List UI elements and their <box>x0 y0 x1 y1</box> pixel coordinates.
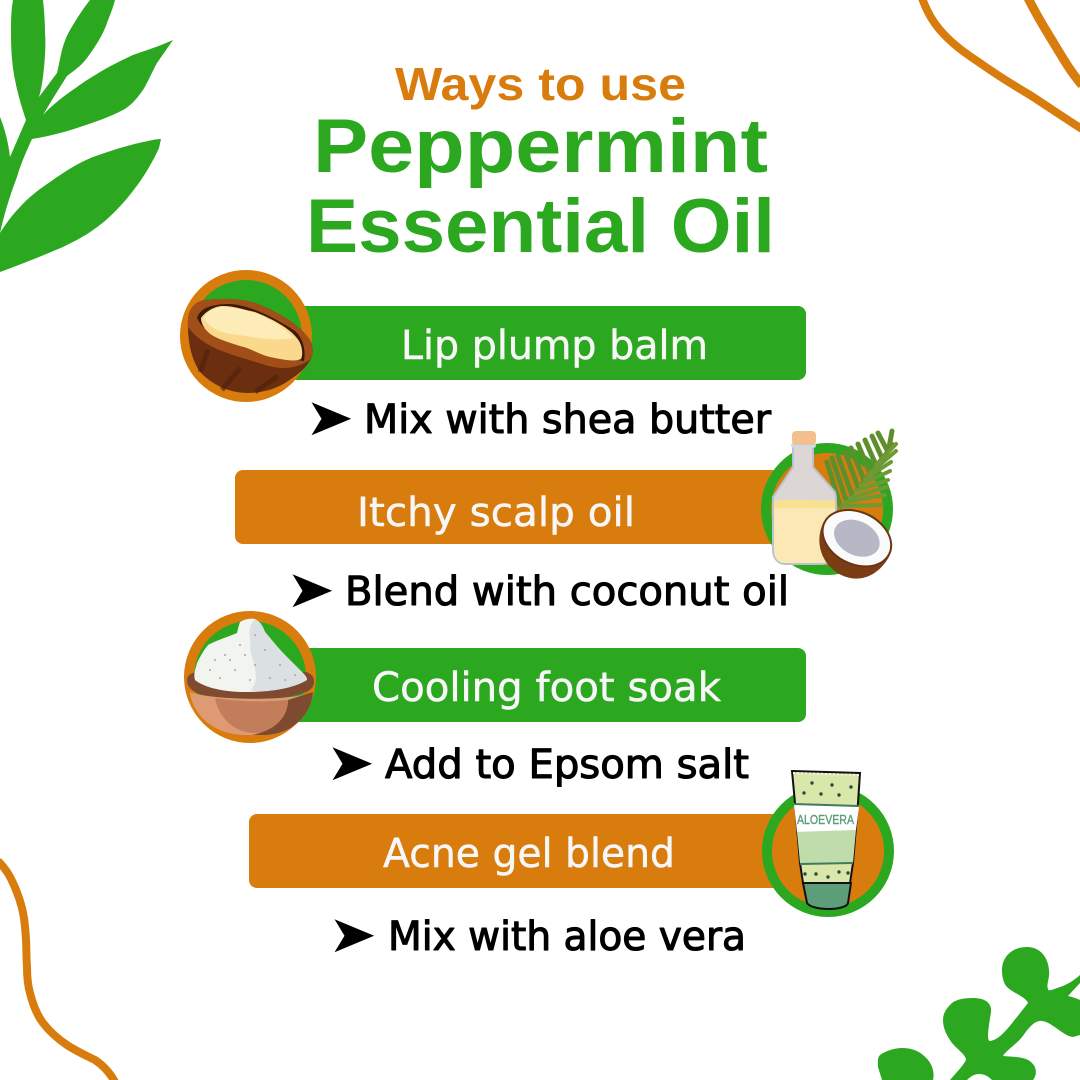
decoration: bottom-right green sprig <box>878 947 1080 1080</box>
palm frond <box>827 431 896 517</box>
decoration: top-right orange curves <box>922 0 1080 129</box>
dots <box>802 781 853 879</box>
tube label: ALOEVERA <box>797 812 854 827</box>
arrow: ➤ <box>286 560 335 620</box>
bar label: Itchy scalp oil <box>357 490 635 536</box>
arrow: ➤ <box>305 388 354 448</box>
item text: Mix with shea butter <box>364 397 772 443</box>
decoration: top-left green leaves <box>0 0 173 272</box>
title line: Essential Oil: Essential Oil <box>306 184 775 269</box>
coconut half <box>806 498 902 590</box>
bottle <box>773 445 836 564</box>
icon: aloe vera tube <box>767 771 889 912</box>
title line: Peppermint: Peppermint <box>313 104 768 189</box>
arrow: ➤ <box>328 905 377 965</box>
bowl <box>190 692 313 735</box>
panel: lip plump balm bar <box>270 306 806 380</box>
salt heap <box>194 619 307 692</box>
list item: mix with aloe vera <box>328 905 746 965</box>
bar label: Acne gel blend <box>383 831 675 877</box>
bar label: Cooling foot soak <box>372 665 722 711</box>
panel: cooling foot soak bar <box>280 648 806 722</box>
title line: Ways to use: Ways to use <box>395 58 686 110</box>
item text: Blend with coconut oil <box>345 569 789 615</box>
list item: add to Epsom salt <box>326 733 749 793</box>
panel: acne gel blend bar <box>249 814 805 888</box>
list item: mix with shea butter <box>305 388 772 448</box>
arrow: ➤ <box>326 733 375 793</box>
title <box>306 58 775 269</box>
list item: blend with coconut oil <box>286 560 789 620</box>
item text: Add to Epsom salt <box>385 742 749 788</box>
icon: shea butter in shell <box>185 275 313 397</box>
icon: bowl of Epsom salt <box>187 616 314 738</box>
tube <box>792 771 860 883</box>
item text: Mix with aloe vera <box>388 914 746 960</box>
bowl rim <box>187 672 314 700</box>
bar label: Lip plump balm <box>401 323 708 369</box>
icon: oil bottle with palm and coconut <box>766 431 902 590</box>
cap <box>803 883 851 909</box>
decoration: bottom-left orange curve <box>0 861 115 1080</box>
panel: itchy scalp oil bar <box>235 470 805 544</box>
